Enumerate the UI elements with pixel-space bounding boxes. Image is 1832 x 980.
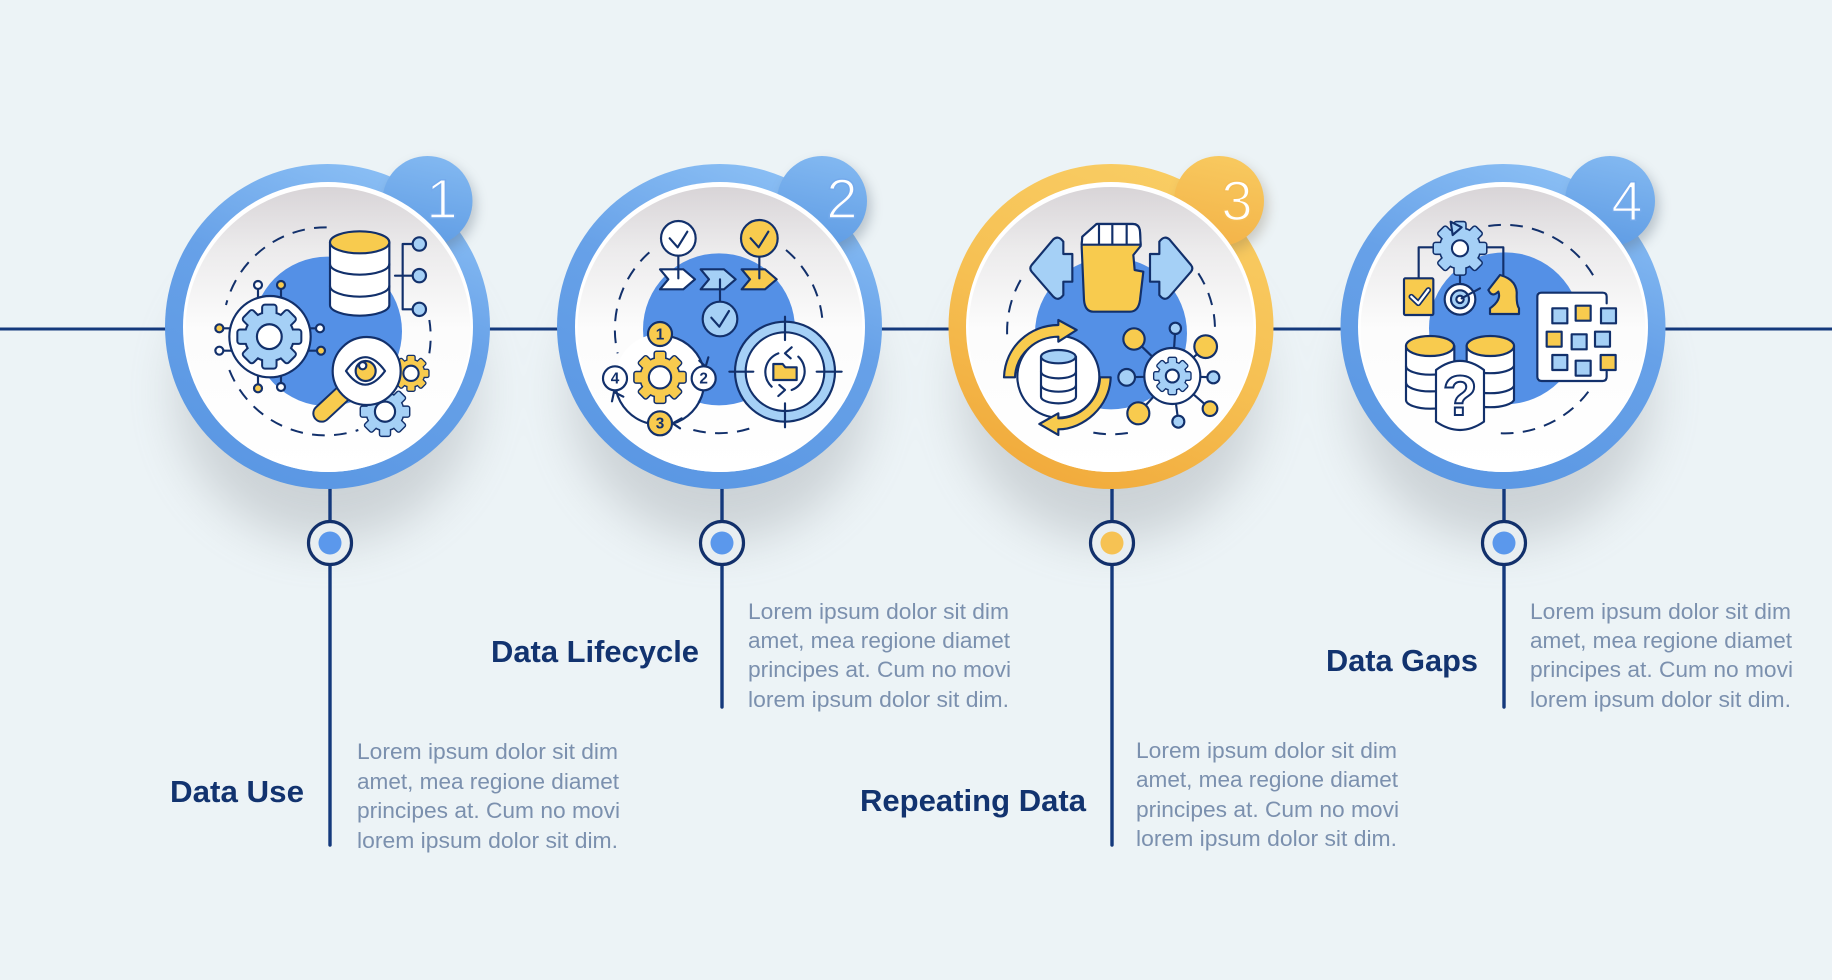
badge 2	[777, 156, 871, 252]
icon: data lifecycle: 1	[656, 326, 665, 343]
text block: Data Gaps description: Lorem ipsum dolor sit dim	[1530, 599, 1791, 624]
outer ring 3	[948, 164, 1274, 489]
panel: step 3 circle	[948, 156, 1274, 489]
text block: Data Gaps description: amet, mea regione diamet	[1530, 628, 1793, 653]
text block: Data Use description: amet, mea regione diamet	[357, 769, 620, 794]
step 1 vertical connector	[308, 480, 352, 845]
panel: step 1 circle	[165, 156, 490, 489]
panel: step 2 circle	[557, 156, 882, 489]
step 2 vertical connector	[700, 480, 744, 707]
step 4 vertical connector	[1482, 480, 1526, 707]
text block: Data Gaps description: lorem ipsum dolor sit dim.	[1530, 687, 1791, 712]
heading: Repeating Data: Repeating Data	[860, 783, 1087, 818]
inner disc 3	[966, 182, 1256, 472]
outer ring 4	[1340, 164, 1666, 489]
text block: Data Lifecycle description: lorem ipsum dolor sit dim.	[748, 687, 1009, 712]
text block: Data Lifecycle description: Lorem ipsum dolor sit dim	[748, 599, 1009, 624]
heading: Data Gaps: Data Gaps	[1326, 643, 1478, 678]
text block: Data Lifecycle description	[748, 599, 1011, 712]
inner disc 4	[1358, 182, 1648, 472]
text block: Data Use description	[357, 739, 620, 853]
text block: Data Gaps description	[1530, 599, 1793, 712]
circle drop shadows	[177, 242, 1653, 542]
text block: Repeating Data description: principes at. Cum no movi	[1136, 797, 1399, 822]
icon: data lifecycle: 3	[656, 416, 664, 433]
badge 1	[382, 156, 476, 252]
inner disc 2	[575, 182, 865, 472]
text block: Repeating Data description: lorem ipsum dolor sit dim.	[1136, 826, 1397, 851]
icon: data lifecycle: 4	[611, 371, 620, 388]
text block: Data Lifecycle description: amet, mea regione diamet	[748, 628, 1011, 653]
icon: data lifecycle: 2	[699, 371, 708, 388]
icon: data gaps	[1404, 222, 1616, 433]
text block: Data Use description: lorem ipsum dolor sit dim.	[357, 828, 618, 853]
text block: Repeating Data description: amet, mea regione diamet	[1136, 767, 1399, 792]
heading: Data Use: Data Use	[170, 774, 304, 809]
outer ring 1	[165, 164, 490, 489]
number 1: 1	[426, 167, 458, 230]
text block: Data Use description: Lorem ipsum dolor sit dim	[357, 739, 618, 764]
text block: Data Use description: principes at. Cum no movi	[357, 798, 620, 823]
number 4: 4	[1611, 169, 1643, 232]
badge 3	[1174, 156, 1268, 252]
number 3: 3	[1221, 169, 1253, 232]
panel: step 4 circle	[1340, 156, 1666, 489]
icon: data use	[215, 227, 431, 436]
horizontal timeline line	[0, 328, 1832, 330]
text block: Repeating Data description: Lorem ipsum dolor sit dim	[1136, 738, 1397, 763]
text block: Data Lifecycle description: principes at. Cum no movi	[748, 657, 1011, 682]
icon: repeating data	[1004, 224, 1219, 435]
icon: data gaps: ?	[1443, 365, 1477, 428]
heading: Data Lifecycle: Data Lifecycle	[491, 634, 699, 669]
badge 4	[1565, 156, 1659, 252]
step 3 vertical connector	[1090, 480, 1134, 845]
text block: Repeating Data description	[1136, 738, 1399, 851]
icon: data lifecycle	[603, 220, 842, 435]
inner disc 1	[183, 182, 473, 472]
text block: Data Gaps description: principes at. Cum no movi	[1530, 657, 1793, 682]
number 2: 2	[826, 167, 858, 230]
outer ring 2	[557, 164, 882, 489]
